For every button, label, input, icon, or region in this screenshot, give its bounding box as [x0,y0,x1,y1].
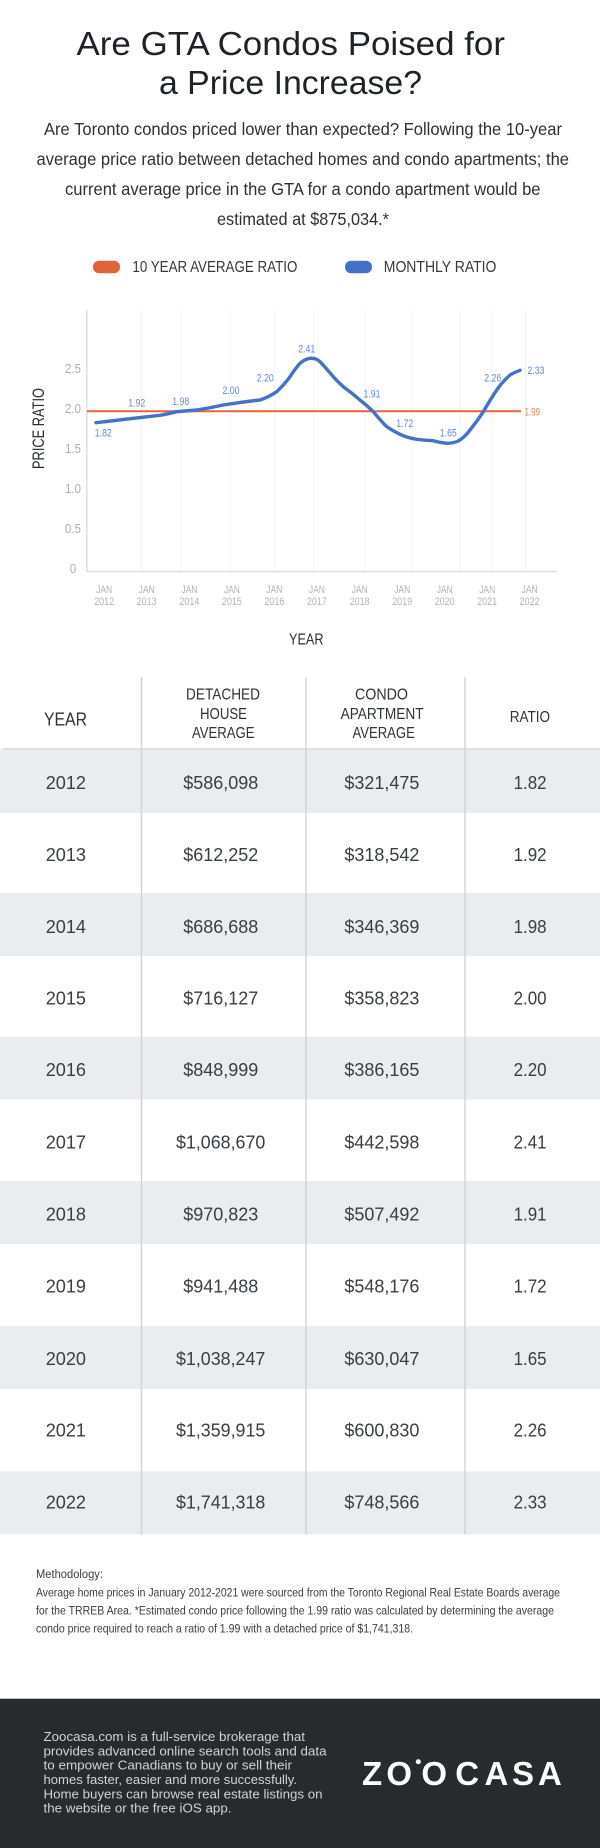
table header: AVERAGE [192,725,254,742]
row 2021: $600,830 [344,1420,419,1441]
average ratio label: 1.99 [525,406,540,418]
x axis labels: JAN [352,584,368,596]
footer description: provides advanced online search tools and data [44,1743,327,1758]
data labels: 2.41 [298,343,315,355]
table header: HOUSE [200,706,247,723]
footer description: Home buyers can browse real estate listings on [44,1787,322,1802]
x axis labels: 2018 [350,596,370,608]
row 2022 [46,1492,547,1513]
x axis labels [94,584,540,608]
row 2020: 1.65 [514,1348,547,1369]
row 2014: 1.98 [514,916,547,937]
x axis labels: 2014 [179,596,199,608]
y axis labels: 0 [70,561,76,576]
row 2016 [46,1059,547,1080]
row 2019: $941,488 [183,1276,258,1297]
monthly ratio line [96,358,520,443]
row 2012 [46,772,547,793]
data table [0,677,600,1534]
x axis labels: JAN [139,584,155,596]
x axis labels: 2020 [435,596,455,608]
x axis labels: 2013 [137,596,157,608]
row 2018: $507,492 [344,1203,419,1224]
row 2014 [46,916,547,937]
data labels: 1.92 [128,397,145,409]
data labels: 1.82 [95,428,112,440]
data labels: 1.65 [440,428,457,440]
table row backgrounds [0,749,600,1534]
row 2014: $686,688 [183,916,258,937]
table rows [46,772,547,1513]
table header: AVERAGE [352,725,415,742]
data labels: 2.33 [528,365,544,377]
x axis labels: 2019 [392,596,412,608]
data labels: 2.00 [222,385,240,397]
footer description: to empower Canadians to buy or sell their [44,1758,293,1773]
methodology note: Methodology: [36,1567,103,1581]
x axis labels: 2022 [520,596,540,608]
x axis labels: JAN [266,584,282,596]
row 2019: $548,176 [344,1276,419,1297]
row 2019 [46,1276,547,1297]
data labels: 2.26 [484,373,501,385]
line chart [29,310,557,648]
row 2014: $346,369 [344,916,419,937]
title [76,25,505,101]
x axis title: YEAR [289,632,324,648]
row 2015: 2015 [46,988,86,1008]
footer description: the website or the free iOS app. [44,1801,231,1816]
y axis labels: 1.5 [65,441,81,456]
footer description: Zoocasa.com is a full-service brokerage that [44,1729,305,1744]
row 2021: 2.26 [514,1420,547,1441]
row 2017: $442,598 [344,1131,419,1152]
intro paragraph: estimated at $875,034.* [217,209,389,229]
y axis labels: 1.0 [65,481,81,496]
row 2015: $358,823 [344,988,419,1008]
y axis title: PRICE RATIO [29,388,48,469]
row 2012: $321,475 [344,772,419,793]
intro paragraph [36,119,569,229]
data labels: 2.20 [257,372,274,384]
table header: DETACHED [186,686,260,703]
logo: Zoocasa: ZOOCASA [362,1755,562,1792]
table header: YEAR [44,709,87,730]
title: Are GTA Condos Poised for [76,25,505,62]
row 2017 [46,1131,547,1152]
table header: RATIO [510,709,550,726]
table header: CONDO [355,686,408,703]
row 2014: 2014 [46,916,86,937]
row 2015 [46,988,547,1008]
row 2013: $612,252 [183,844,258,865]
row 2017: $1,068,670 [176,1131,265,1152]
row 2017: 2017 [46,1131,86,1152]
row 2016: 2.20 [514,1059,547,1080]
x axis labels: JAN [522,584,538,596]
row 2022: 2022 [46,1492,86,1513]
x axis labels: JAN [224,584,240,596]
intro paragraph: average price ratio between detached homes and condo apartments; the [36,149,569,169]
row 2018: 1.91 [514,1203,547,1224]
title: a Price Increase? [159,64,422,101]
row 2020: $1,038,247 [176,1348,265,1369]
average ratio line [87,410,521,412]
y axis labels: 0.5 [65,521,81,536]
row 2012: 2012 [46,772,86,793]
row 2015: $716,127 [183,988,258,1008]
row 2019: 2019 [46,1276,86,1297]
data labels: 1.91 [364,389,380,401]
legend item: monthly ratio: MONTHLY RATIO [384,259,496,276]
x axis labels: 2012 [94,596,114,608]
row 2016: 2016 [46,1059,86,1080]
y axis labels: 2.0 [65,401,81,416]
table header [44,686,550,742]
x axis labels: JAN [181,584,197,596]
row 2018: 2018 [46,1203,86,1224]
table header: APARTMENT [341,706,424,723]
x axis labels: 2021 [477,596,497,608]
data labels [95,343,545,440]
x axis labels: JAN [96,584,112,596]
legend item: 10 year average ratio: 10 YEAR AVERAGE RATIO [132,259,297,276]
row 2019: 1.72 [514,1276,547,1297]
footer [0,1699,600,1848]
row 2015: 2.00 [514,988,547,1008]
methodology note [36,1567,560,1636]
row 2022: $748,566 [344,1492,419,1513]
data labels: 1.72 [396,418,413,430]
footer description: homes faster, easier and more successfully. [44,1772,297,1787]
intro paragraph: current average price in the GTA for a condo apartment would be [65,179,540,199]
row 2022: 2.33 [514,1492,547,1513]
x axis labels: 2017 [307,596,327,608]
methodology note: condo price required to reach a ratio of 1.99 with a detached price of $1,741,318. [36,1622,413,1636]
footer description [44,1729,327,1816]
row 2020: $630,047 [344,1348,419,1369]
x axis labels: 2015 [222,596,242,608]
row 2020 [46,1348,547,1369]
legend [93,259,496,276]
row 2021: $1,359,915 [176,1420,265,1441]
row 2016: $848,999 [183,1059,258,1080]
row 2013: $318,542 [344,844,419,865]
data labels: 1.98 [172,396,189,408]
row 2016: $386,165 [344,1059,419,1080]
row 2021 [46,1420,547,1441]
x axis labels: JAN [479,584,495,596]
y axis labels [65,361,81,576]
row 2020: 2020 [46,1348,86,1369]
x axis labels: JAN [394,584,410,596]
x axis labels: JAN [437,584,453,596]
y axis labels: 2.5 [65,361,81,376]
intro paragraph: Are Toronto condos priced lower than expected? Following the 10-year [44,119,562,139]
row 2018 [46,1203,547,1224]
row 2018: $970,823 [183,1203,258,1224]
row 2013 [46,844,547,865]
row 2013: 2013 [46,844,86,865]
row 2021: 2021 [46,1420,86,1441]
legend item: monthly ratio [345,259,496,276]
x axis labels: JAN [309,584,325,596]
row 2013: 1.92 [514,844,547,865]
row 2012: 1.82 [514,772,547,793]
row 2017: 2.41 [514,1131,547,1152]
row 2022: $1,741,318 [176,1492,265,1513]
x axis labels: 2016 [264,596,284,608]
row 2012: $586,098 [183,772,258,793]
